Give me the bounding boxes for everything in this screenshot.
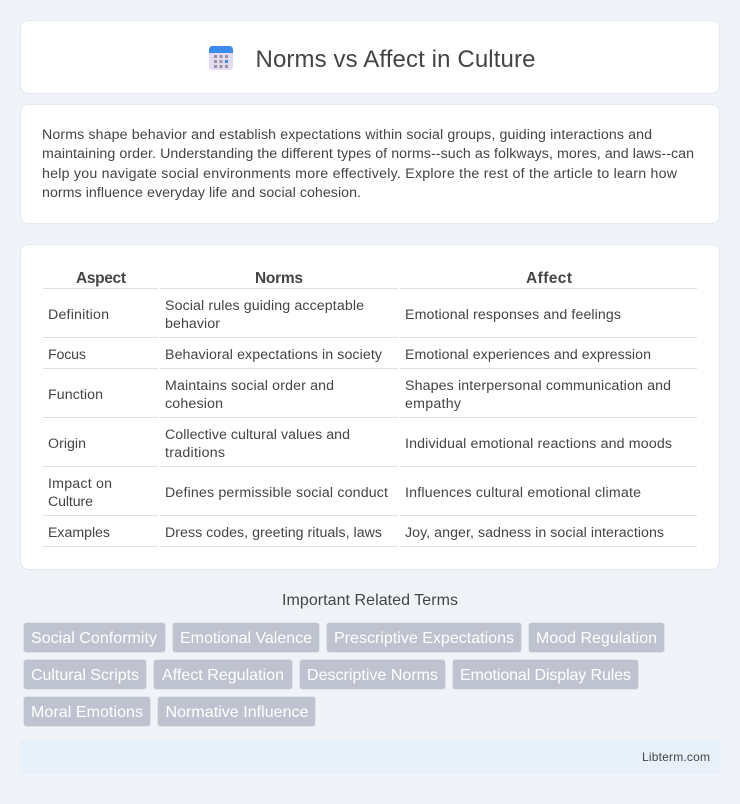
- row: function: empathy: [405, 396, 462, 412]
- tag: [158, 696, 316, 726]
- panel: introduction: maintaining order. Understanding the different types of norms--such as folkways, mores, and laws--can: [42, 146, 694, 162]
- row: origin: Individual emotional reactions and moods: [405, 436, 672, 452]
- row: definition: Definition: [48, 307, 109, 323]
- tag: [24, 660, 146, 690]
- panel: header: [20, 20, 720, 94]
- table header: [76, 270, 572, 287]
- tag: Mood Regulation: [536, 630, 657, 647]
- row: function: Function: [48, 387, 103, 403]
- tag: [452, 660, 638, 690]
- row: impact on culture: Culture: [48, 494, 93, 510]
- row: focus: [48, 347, 651, 363]
- panel: introduction: norms influence everyday life and social cohesion.: [42, 185, 361, 201]
- row: origin: Collective cultural values and: [165, 427, 350, 443]
- panel: comparison table: [20, 244, 720, 570]
- tag: Affect Regulation: [162, 667, 284, 684]
- tag: Descriptive Norms: [307, 667, 438, 684]
- tag: [172, 622, 320, 652]
- heading: related terms: Important Related Terms: [282, 592, 458, 609]
- row: function: Maintains social order and: [165, 378, 334, 394]
- panel: introduction: [20, 104, 720, 224]
- row: examples: Examples: [48, 525, 110, 541]
- title: Norms vs Affect in Culture: [256, 46, 536, 73]
- tag: Moral Emotions: [31, 704, 143, 721]
- row: function: [48, 378, 671, 412]
- tag: Prescriptive Expectations: [334, 630, 514, 647]
- row: definition: behavior: [165, 316, 220, 332]
- footer: [20, 740, 720, 774]
- row: focus: Emotional experiences and expression: [405, 347, 651, 363]
- tag: Emotional Valence: [180, 630, 312, 647]
- row: impact on culture: Impact on: [48, 476, 112, 492]
- row: definition: [48, 298, 621, 332]
- icon: calendar: [209, 46, 233, 70]
- tag: [528, 622, 664, 652]
- row: focus: Behavioral expectations in society: [165, 347, 383, 363]
- row: definition: Emotional responses and feelings: [405, 307, 621, 323]
- table header: Norms: [255, 270, 303, 287]
- row: impact on culture: Influences cultural emotional climate: [405, 485, 641, 501]
- tag: Emotional Display Rules: [460, 667, 631, 684]
- tag: Normative Influence: [166, 704, 309, 721]
- panel: introduction: help you navigate social environments more effectively. Explore the rest of the article to learn how: [42, 166, 678, 182]
- row: definition: Social rules guiding acceptable: [165, 298, 364, 314]
- row: impact on culture: [48, 476, 641, 510]
- footer: Libterm.com: [642, 750, 710, 764]
- tag: Social Conformity: [31, 630, 157, 647]
- row: examples: [48, 525, 664, 541]
- row: examples: Dress codes, greeting rituals, laws: [165, 525, 382, 541]
- row: focus: Focus: [48, 347, 86, 363]
- tag: [326, 622, 522, 652]
- row: function: cohesion: [165, 396, 223, 412]
- tag: [24, 696, 150, 726]
- row: examples: Joy, anger, sadness in social interactions: [405, 525, 664, 541]
- panel: introduction: Norms shape behavior and establish expectations within social groups, guiding interactions and: [42, 127, 652, 143]
- row: impact on culture: Defines permissible social conduct: [165, 485, 388, 501]
- tag: Cultural Scripts: [31, 667, 139, 684]
- tag: [300, 660, 446, 690]
- row: origin: traditions: [165, 445, 225, 461]
- row: function: Shapes interpersonal communication and: [405, 378, 671, 394]
- tag: [24, 622, 166, 652]
- row: origin: Origin: [48, 436, 86, 452]
- tag: [154, 660, 292, 690]
- table header: Affect: [526, 270, 572, 287]
- table header: Aspect: [76, 270, 126, 287]
- tags: related terms: [24, 622, 664, 726]
- row: origin: [48, 427, 672, 461]
